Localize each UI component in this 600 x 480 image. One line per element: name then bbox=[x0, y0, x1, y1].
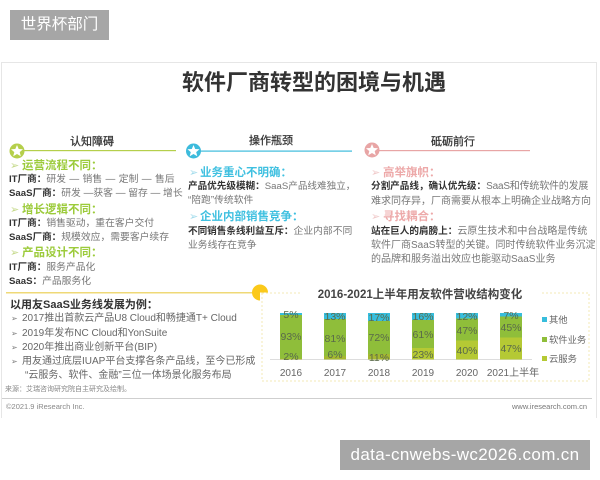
list item 2020: 2020年推出商业创新平台(BIP) bbox=[22, 342, 157, 353]
subheading: business focus: ➢ bbox=[189, 167, 198, 179]
text: product IT vendors: IT厂商：服务产品化 bbox=[9, 262, 95, 273]
panel: cognitive barriers bbox=[9, 136, 183, 287]
text: growth SaaS vendors: SaaS厂商：规模效应，需要客户续存 bbox=[9, 232, 169, 243]
subheading: growth: ➢ bbox=[10, 204, 19, 216]
subheading: growth: 增长逻辑不同： bbox=[22, 204, 102, 216]
value labels: 45% bbox=[500, 322, 522, 334]
list item IUAP: ➢ bbox=[11, 357, 18, 366]
subheading: seek coupling: ➢ bbox=[371, 211, 380, 223]
text: business lines compete: 业务线存在竞争 bbox=[188, 240, 257, 251]
value labels: 12% bbox=[456, 311, 478, 323]
subheading: raise the flag: ➢ bbox=[371, 167, 380, 179]
footer rule bbox=[2, 398, 592, 399]
value labels: 5% bbox=[283, 309, 299, 321]
badge: top left label bbox=[10, 10, 109, 40]
list item 2019: ➢ bbox=[11, 329, 18, 338]
subheading: business focus: 业务重心不明确： bbox=[200, 167, 292, 179]
subheading: raise the flag: 高举旗帜： bbox=[383, 167, 440, 179]
value labels: 16% bbox=[412, 311, 434, 323]
list item continuation: “云服务、软件、金融”三位一体场景化服务布局 bbox=[25, 370, 232, 381]
subheading: internal competition: 企业内部销售竞争： bbox=[200, 211, 304, 223]
subheading: process: 运营流程不同： bbox=[22, 160, 102, 172]
text: product priority: 产品优先级模糊：SaaS产品线难独立， bbox=[188, 181, 355, 192]
icon: green star with line bbox=[10, 144, 176, 158]
panel: yonyou example bbox=[10, 298, 255, 381]
badge: bottom right watermark bbox=[340, 440, 590, 470]
year labels: 2021上半年 bbox=[487, 366, 539, 379]
text: process SaaS vendors: SaaS厂商：研发 —获客 — 留存 — 增长 bbox=[9, 188, 183, 199]
text: accompany: “陪跑”传统软件 bbox=[188, 195, 253, 206]
divider with yellow pac-man marker bbox=[6, 284, 268, 300]
icon: blue star with line bbox=[186, 144, 352, 158]
source note: 来源：艾瑞咨询研究院自主研究及绘制。 bbox=[5, 386, 131, 393]
value labels: 11% bbox=[369, 352, 389, 364]
legend: 软件业务 bbox=[549, 334, 586, 345]
bar 2018 bbox=[368, 313, 390, 360]
value labels: 17% bbox=[368, 312, 390, 324]
bar 2016 bbox=[280, 313, 302, 360]
chart title: 2016-2021上半年用友软件营收结构变化 bbox=[318, 287, 523, 301]
value labels: 23% bbox=[412, 349, 434, 361]
icon: pink star with line bbox=[364, 142, 530, 158]
bar 2021H1 bbox=[500, 313, 522, 360]
subheading: internal competition: ➢ bbox=[189, 211, 198, 223]
subheading: product design: 产品设计不同： bbox=[22, 247, 102, 259]
bar 2019 bbox=[412, 313, 434, 360]
year labels: 2016 bbox=[280, 368, 303, 379]
footer copyright: ©2021.9 iResearch Inc. bbox=[6, 402, 84, 411]
legend: 云服务 bbox=[549, 353, 577, 364]
list item 2017: ➢ bbox=[11, 314, 18, 323]
heading: moving forward: 砥砺前行 bbox=[431, 136, 475, 148]
subheading: seek coupling: 寻找耦合： bbox=[383, 211, 440, 223]
value labels: 40% bbox=[456, 345, 478, 357]
list item 2017: 2017推出首款云产品U8 Cloud和畅捷通T+ Cloud bbox=[22, 313, 237, 324]
footer website: www.iresearch.com.cn bbox=[512, 402, 587, 411]
value labels bbox=[280, 309, 522, 364]
value labels: 7% bbox=[503, 310, 519, 322]
panel: operational bottlenecks bbox=[186, 134, 355, 251]
bar 2020 bbox=[456, 313, 478, 360]
text: growth IT vendors: IT厂商：销售驱动，重在客户交付 bbox=[9, 218, 154, 229]
panel: moving forward bbox=[364, 136, 596, 265]
text: process IT vendors: IT厂商：研发 — 销售 — 定制 — 售后 bbox=[9, 174, 175, 185]
value labels: 47% bbox=[500, 343, 522, 355]
title: 软件厂商转型的困境与机遇 bbox=[182, 70, 446, 95]
text: split product lines: 分割产品线，确认优先级：SaaS和传统软件的发展 bbox=[371, 181, 588, 192]
badge: top left label: 世界杯部门 bbox=[21, 16, 98, 33]
badge: bottom right watermark: data-cnwebs-wc2026.com.cn bbox=[351, 445, 579, 464]
value labels: 13% bbox=[324, 311, 346, 323]
list item IUAP: 用友通过底层IUAP平台支撑各条产品线，至今已形成 bbox=[22, 356, 255, 367]
heading: operational bottlenecks: 操作瓶颈 bbox=[249, 135, 293, 147]
text: key to transformation: 软件厂商SaaS转型的关键。同时传统软件业务沉淀 bbox=[371, 240, 595, 251]
year labels: 2018 bbox=[368, 368, 391, 379]
chart: revenue structure bbox=[262, 287, 590, 382]
slide frame bbox=[1, 62, 597, 418]
legend bbox=[542, 314, 586, 364]
value labels: 6% bbox=[327, 349, 343, 361]
list item 2019: 2019年发布NC Cloud和YonSuite bbox=[22, 328, 167, 339]
value labels: 61% bbox=[412, 329, 434, 341]
text: seek common ground: 难求同存异，厂商需要从根本上明确企业战略方向 bbox=[371, 196, 591, 207]
text: brand spillover: 的品牌和服务溢出效应也能驱动SaaS业务 bbox=[371, 254, 555, 265]
text: product SaaS: SaaS：产品服务化 bbox=[9, 276, 91, 287]
value labels: 81% bbox=[324, 333, 346, 345]
list item 2020: ➢ bbox=[11, 343, 18, 352]
heading: cognitive barriers: 认知障碍 bbox=[70, 136, 114, 148]
heading: yonyou example: 以用友SaaS业务线发展为例： bbox=[10, 299, 158, 311]
text: sales lines conflict: 不同销售条线利益互斥：企业内部不同 bbox=[188, 226, 352, 237]
value labels: 72% bbox=[368, 332, 390, 344]
year labels bbox=[280, 366, 539, 379]
value labels: 2% bbox=[283, 351, 299, 363]
subheading: product design: ➢ bbox=[10, 247, 19, 259]
subheading: process: ➢ bbox=[10, 160, 19, 172]
year labels: 2019 bbox=[412, 368, 435, 379]
year labels: 2020 bbox=[456, 368, 479, 379]
year labels: 2017 bbox=[324, 368, 347, 379]
value labels: 93% bbox=[280, 331, 302, 343]
bar 2017 bbox=[324, 313, 346, 360]
value labels: 47% bbox=[456, 325, 478, 337]
legend: 其他 bbox=[549, 314, 568, 325]
text: on giants shoulders: 站在巨人的肩膀上：云原生技术和中台战略是传统 bbox=[371, 226, 587, 237]
